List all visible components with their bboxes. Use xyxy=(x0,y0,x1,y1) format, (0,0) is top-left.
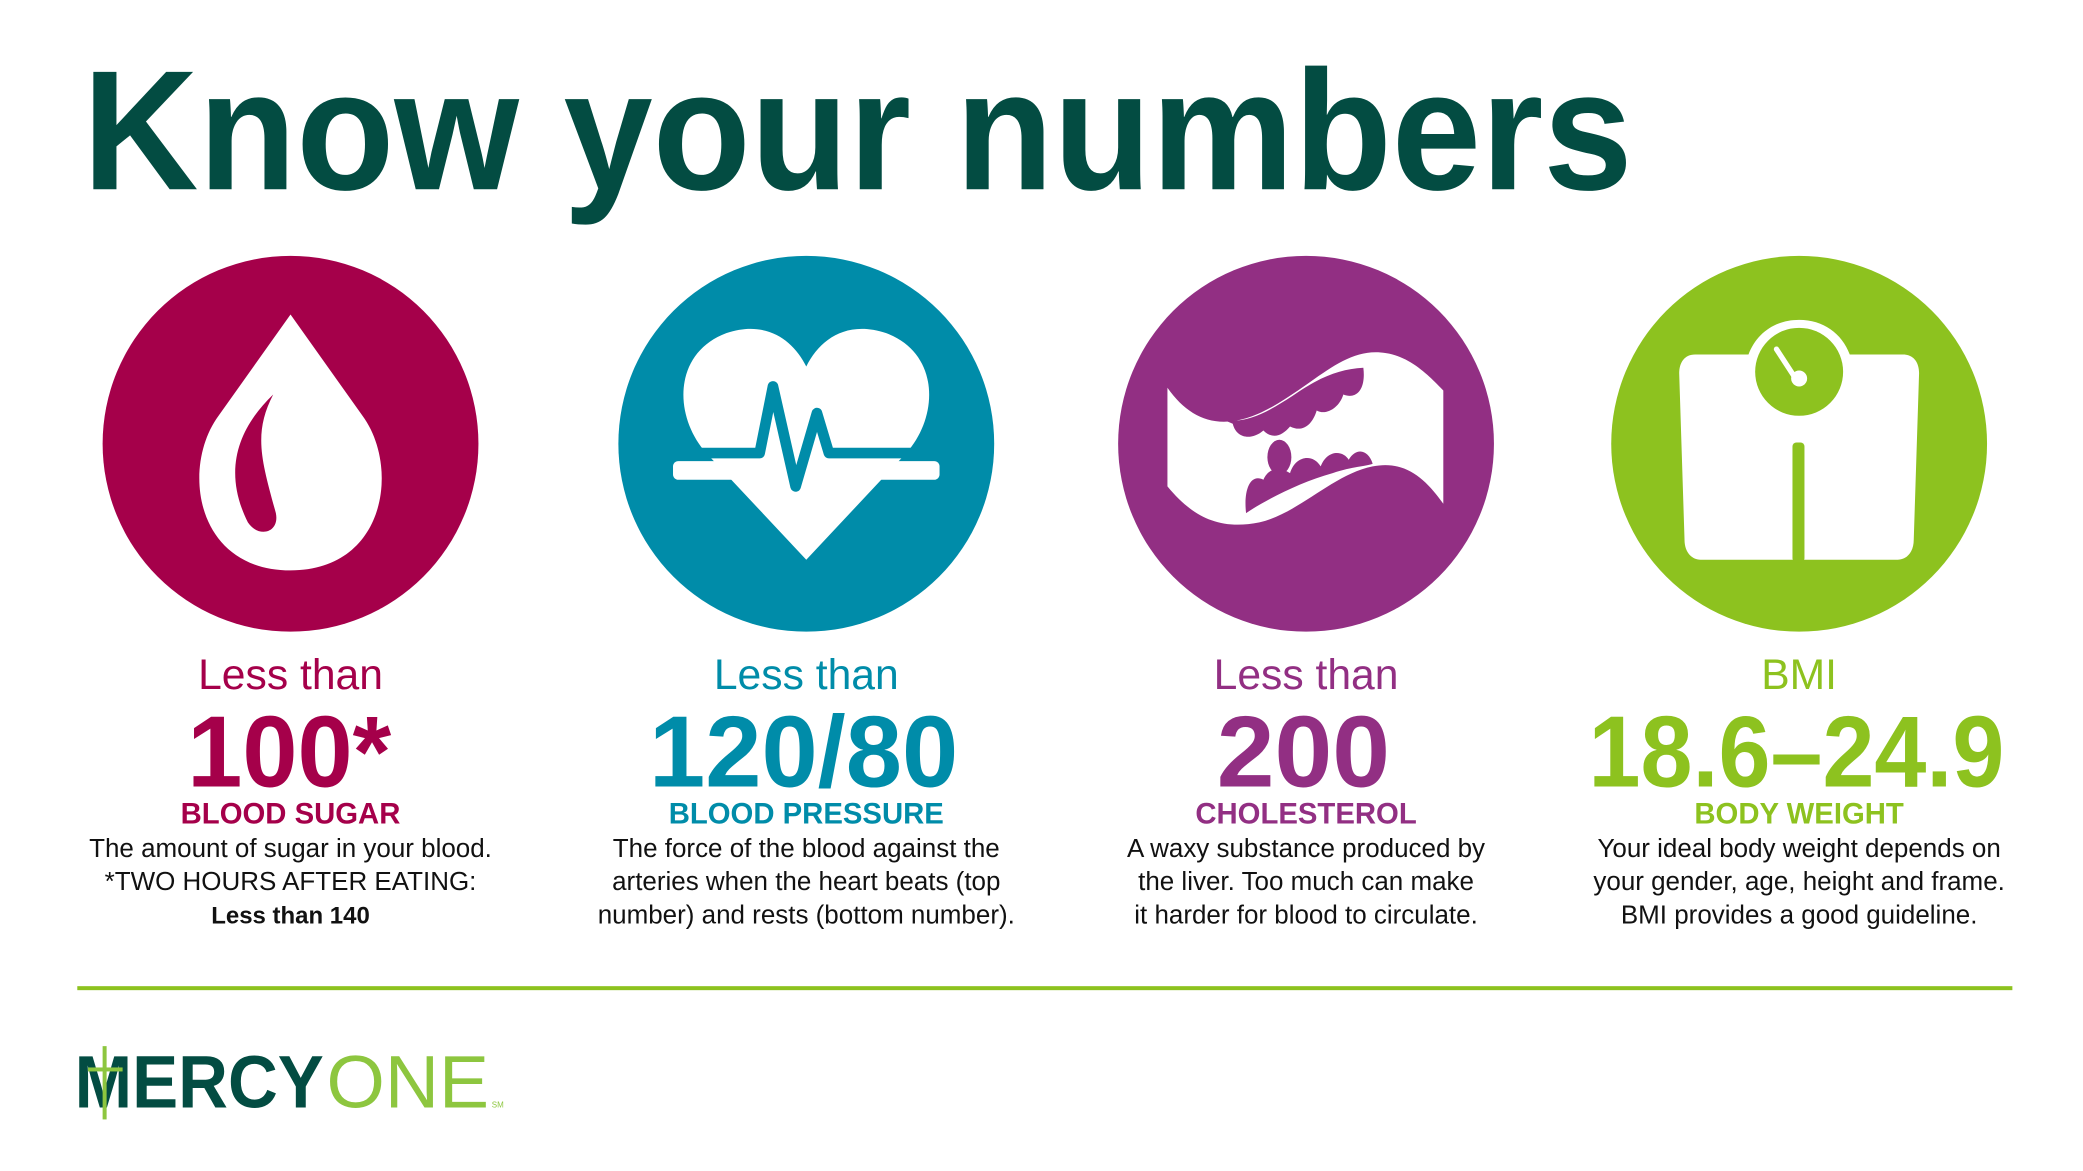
heading: less than: Less than xyxy=(714,651,899,699)
icon: bathroom scale xyxy=(1611,256,1987,632)
logo: MercyOne: MERCY xyxy=(75,1039,324,1123)
description: The force of the blood against the xyxy=(613,833,1000,863)
label: BLOOD PRESSURE xyxy=(669,798,944,831)
description: Less than 140 xyxy=(211,903,370,930)
heading: BMI: BMI xyxy=(1761,651,1837,699)
description: it harder for blood to circulate. xyxy=(1134,900,1478,930)
logo: MercyOne: ONE xyxy=(327,1039,489,1123)
number: 100*: 100* xyxy=(187,695,392,808)
label: CHOLESTEROL xyxy=(1195,798,1417,831)
title: Know your numbers xyxy=(83,36,1633,226)
label: BLOOD SUGAR xyxy=(181,798,400,831)
description: number) and rests (bottom number). xyxy=(598,900,1015,930)
panel: blood sugar xyxy=(89,256,492,930)
description: your gender, age, height and frame. xyxy=(1593,866,2005,896)
icon: heart with pulse xyxy=(618,256,994,632)
panel: cholesterol xyxy=(1118,256,1494,930)
icon: artery with plaque xyxy=(1118,256,1494,632)
description xyxy=(1127,833,1485,930)
heading: less than: Less than xyxy=(198,651,383,699)
logo: MercyOne: SM xyxy=(492,1100,504,1109)
heading: less than: Less than xyxy=(1214,651,1398,699)
number: 200: 200 xyxy=(1217,695,1390,808)
icon: blood drop xyxy=(103,256,478,632)
description: BMI provides a good guideline. xyxy=(1621,900,1977,930)
logo: MercyOne xyxy=(75,1039,504,1123)
description: the liver. Too much can make xyxy=(1138,866,1474,896)
description: A waxy substance produced by xyxy=(1127,833,1485,863)
panel: blood pressure xyxy=(598,256,1015,930)
description: *TWO HOURS AFTER EATING: xyxy=(105,866,476,896)
description xyxy=(89,833,492,930)
number: 18.6-24.9: 18.6–24.9 xyxy=(1589,695,2004,808)
panel: body weight xyxy=(1589,256,2005,930)
label: BODY WEIGHT xyxy=(1694,798,1904,831)
description: Your ideal body weight depends on xyxy=(1597,833,2001,863)
number: 120/80: 120/80 xyxy=(649,695,958,808)
description xyxy=(598,833,1015,930)
description: The amount of sugar in your blood. xyxy=(89,833,492,863)
description: arteries when the heart beats (top xyxy=(612,866,1000,896)
description xyxy=(1593,833,2005,930)
